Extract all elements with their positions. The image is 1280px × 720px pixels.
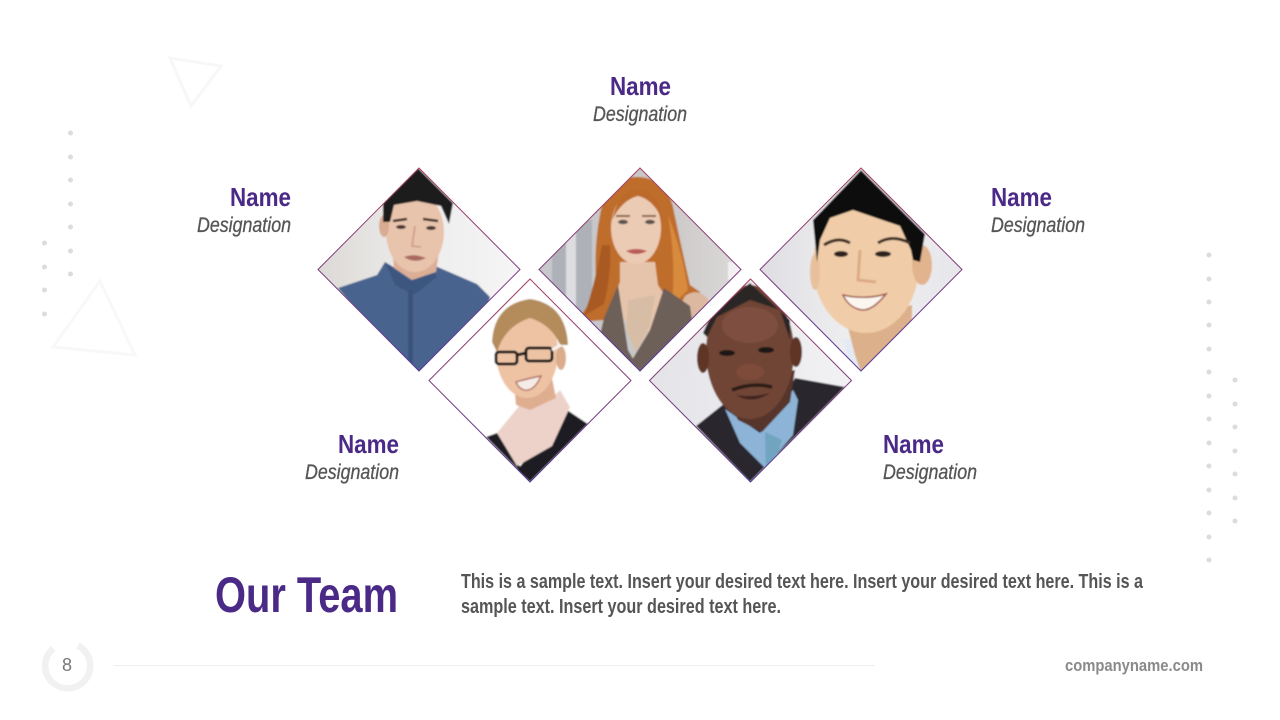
lower right member label: Name (883, 429, 944, 459)
right member label: Designation (991, 214, 1085, 237)
top member label (593, 71, 687, 126)
footer line (114, 664, 875, 666)
right member label: Name (991, 182, 1052, 212)
left member label (197, 182, 291, 237)
left member label: Name (230, 182, 291, 212)
left member label: Designation (197, 214, 291, 237)
decorative dots left (42, 130, 73, 316)
body text: sample text. Insert your desired text here. (461, 596, 781, 618)
lower right member label: Designation (883, 461, 977, 484)
decorative dots right (1206, 252, 1238, 562)
lower left member label (305, 429, 399, 484)
decorative triangle top (170, 58, 221, 106)
portrait diamond: smiling man (760, 168, 962, 372)
page number ring (45, 646, 90, 688)
decorative triangle lower (53, 281, 135, 355)
portrait diamond: man in dark suit (650, 279, 852, 482)
right member label (991, 182, 1085, 237)
title: Our Team: Our Team (215, 567, 398, 623)
portrait diamond: man in denim shirt (318, 168, 520, 372)
top member label: Designation (593, 103, 687, 126)
top member label: Name (610, 71, 671, 101)
lower left member label: Name (338, 429, 399, 459)
portrait diamond: woman with red hair (539, 168, 741, 372)
lower left member label: Designation (305, 461, 399, 484)
portrait diamond: woman with glasses (429, 279, 631, 482)
footer website: companyname.com (1065, 656, 1203, 675)
body text (461, 571, 1144, 618)
lower right member label (883, 429, 977, 484)
page number ring: 8 (62, 655, 72, 675)
